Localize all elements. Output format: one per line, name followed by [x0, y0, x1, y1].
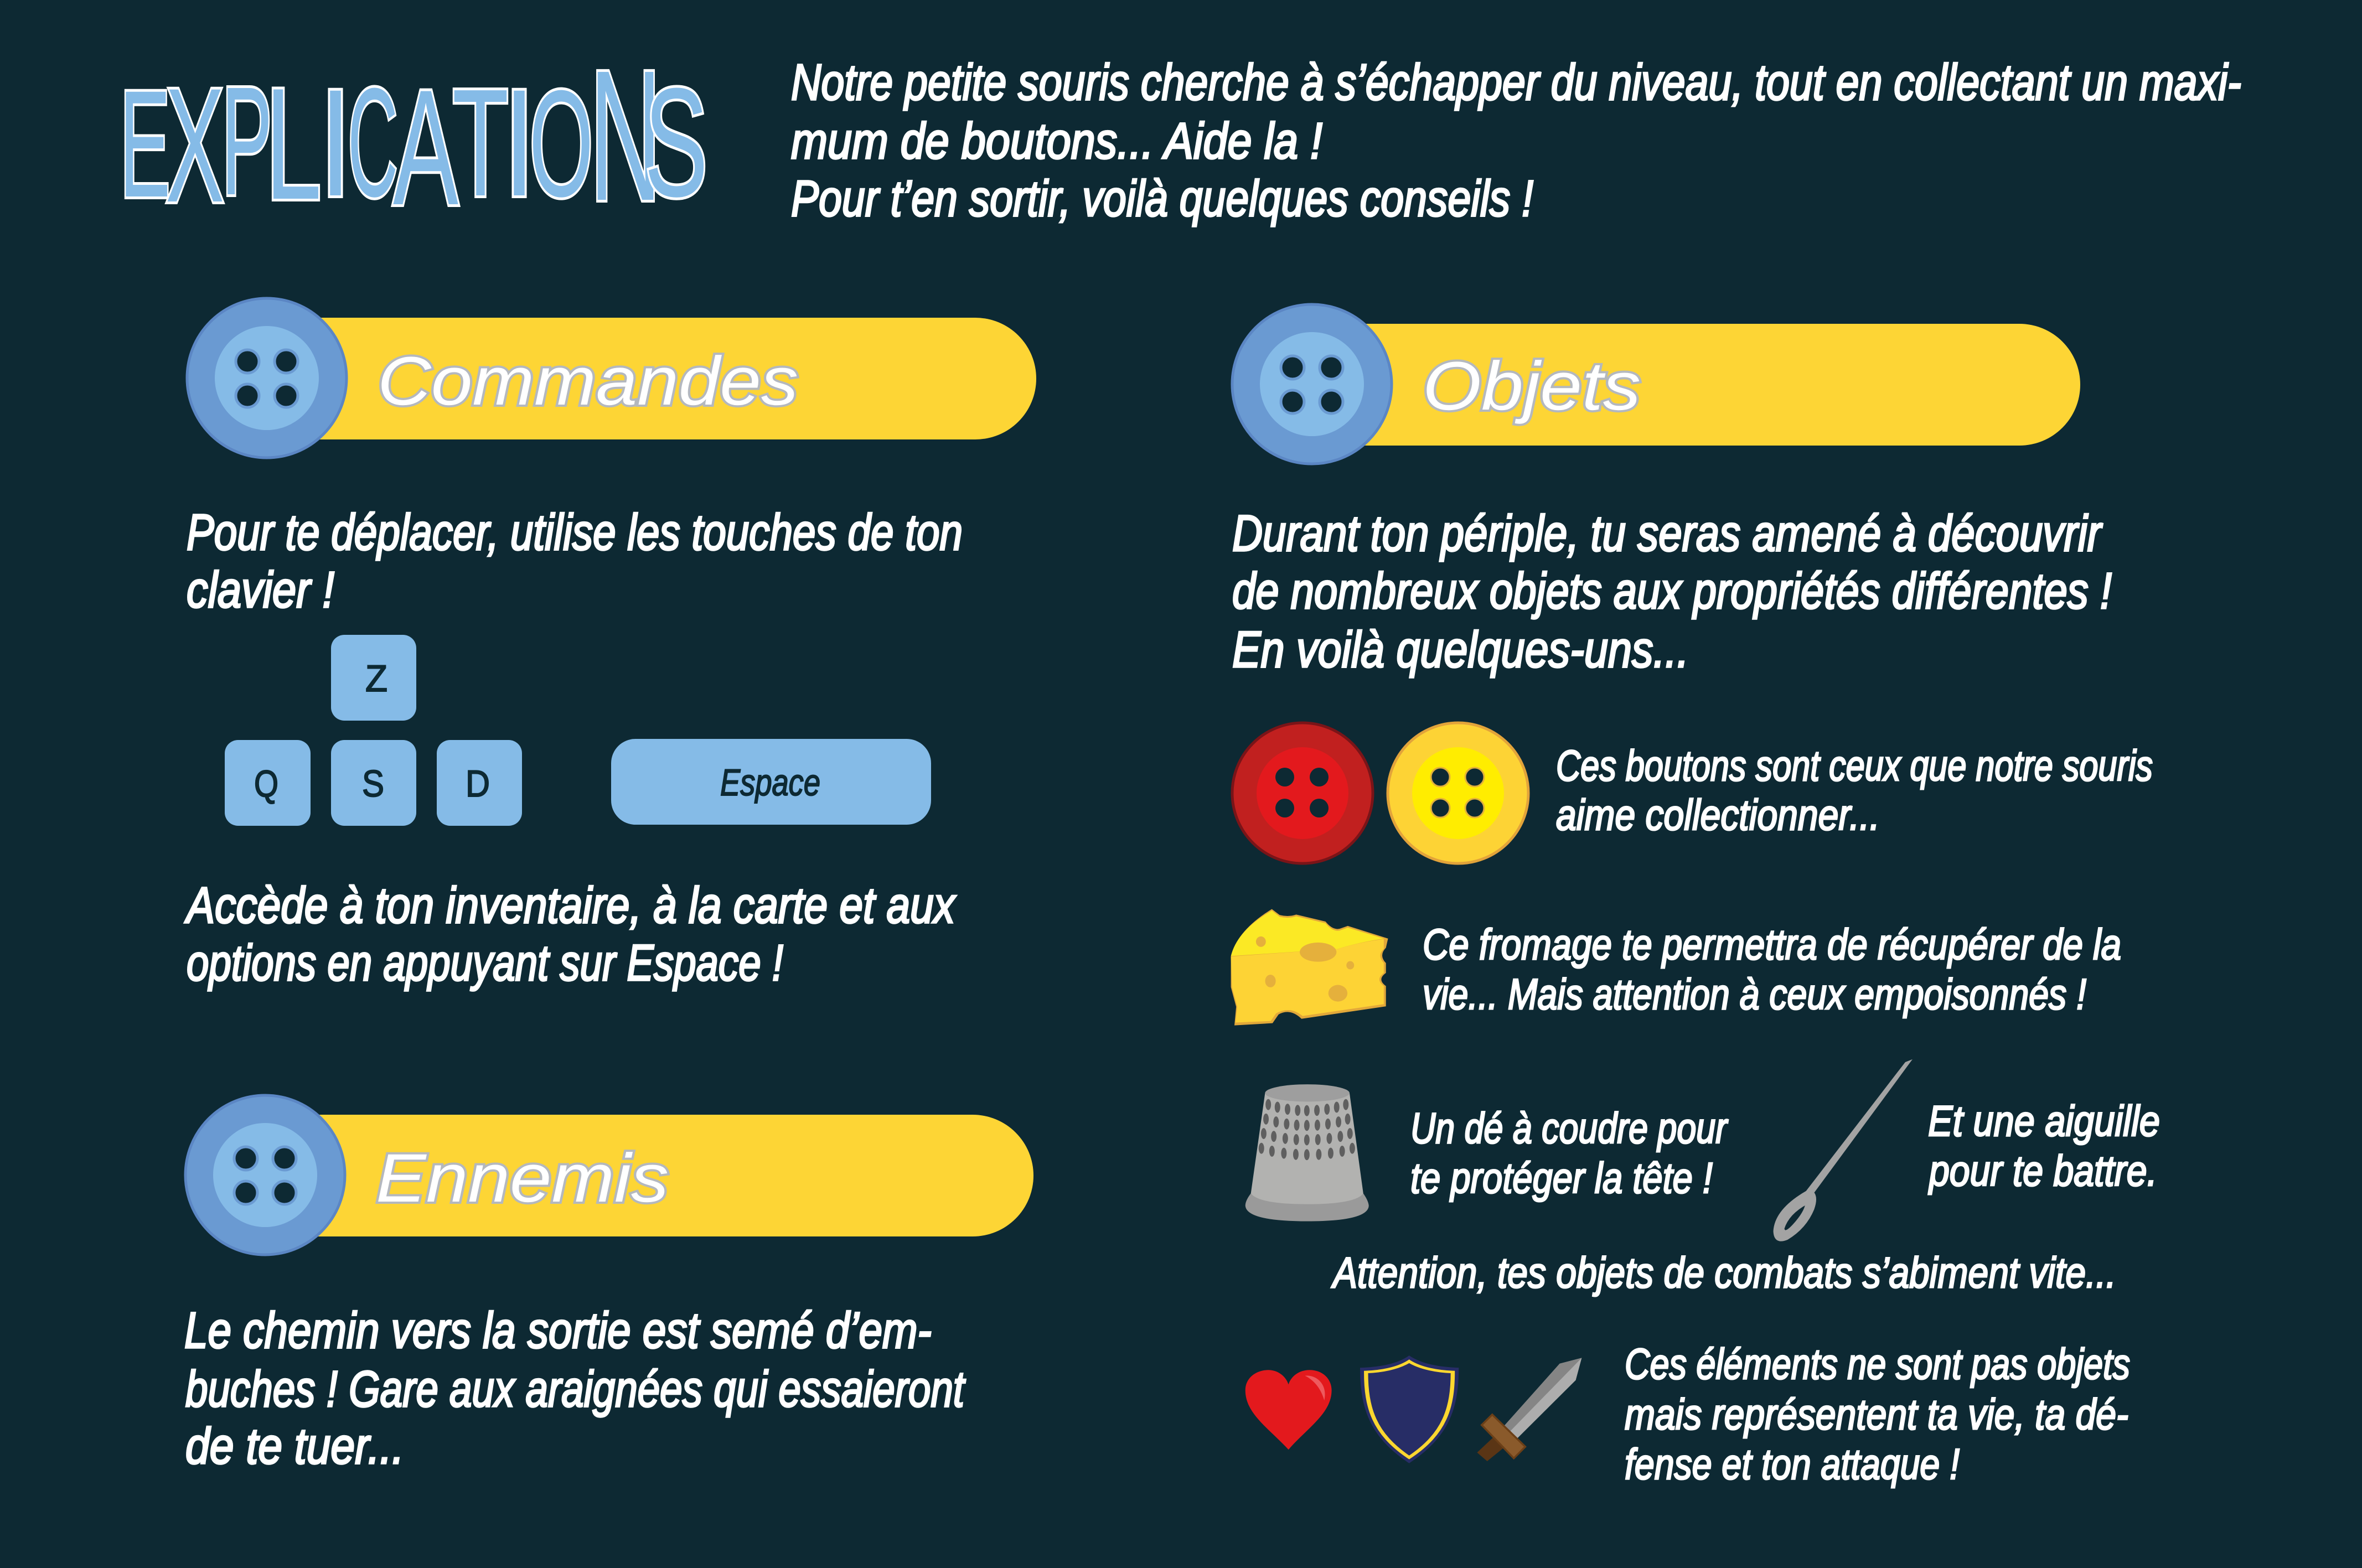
text: boutons — [1556, 741, 2153, 839]
title: C — [348, 56, 398, 229]
title: L — [265, 55, 322, 232]
icon: cheese — [1231, 909, 1388, 1026]
text: objets intro: de nombreux objets aux propriétés différentes ! — [1232, 563, 2112, 619]
title: P — [221, 55, 272, 227]
title: O — [529, 59, 593, 229]
text: fromage — [1423, 920, 2121, 1018]
banner: objets: Objets — [1423, 348, 1641, 425]
panel: objets — [1231, 304, 2160, 1488]
icon: thimble — [1245, 1084, 1369, 1221]
text: objets intro — [1232, 505, 2112, 678]
text: aiguille: pour te battre. — [1928, 1146, 2157, 1195]
text: aiguille — [1928, 1096, 2160, 1195]
icon: red button — [1232, 723, 1373, 863]
icon: sword — [1477, 1358, 1581, 1461]
text: dé à coudre — [1410, 1104, 1728, 1202]
banner: ennemis: Ennemis — [376, 1140, 669, 1217]
text: éléments: mais représentent ta vie, ta dé- — [1625, 1390, 2128, 1438]
keyboard keys: D — [466, 763, 490, 805]
title: E — [120, 59, 170, 229]
icon: needle — [1775, 1061, 1910, 1240]
text: éléments: fense et ton attaque ! — [1625, 1440, 1960, 1488]
text: ennemis: buches ! Gare aux araignées qui essaieront — [185, 1361, 966, 1417]
text: objets intro: En voilà quelques-uns... — [1232, 622, 1689, 678]
title: N — [590, 32, 661, 240]
keyboard keys: Espace — [720, 762, 820, 804]
text: boutons: Ces boutons sont ceux que notre souris — [1556, 741, 2153, 790]
title: S — [644, 56, 708, 229]
banner: commandes: Commandes — [378, 343, 798, 420]
text: dé à coudre: te protéger la tête ! — [1410, 1153, 1713, 1202]
keyboard keys: Z — [365, 658, 387, 700]
intro text: Pour t’en sortir, voilà quelques conseils ! — [791, 170, 1533, 227]
text: inventaire — [184, 877, 956, 991]
text: inventaire: Accède à ton inventaire, à la carte et aux — [184, 877, 956, 934]
panel: ennemis — [184, 1095, 1033, 1474]
title: A — [393, 55, 459, 239]
text: déplacement: Pour te déplacer, utilise les touches de ton — [187, 504, 963, 561]
text: ennemis: Le chemin vers la sortie est semé d’em- — [184, 1302, 932, 1359]
title: I — [319, 58, 352, 228]
banner: commandes — [187, 298, 1036, 458]
icon: shield — [1360, 1355, 1459, 1463]
text: éléments — [1625, 1339, 2130, 1488]
keyboard keys: S — [362, 763, 384, 805]
text: objets intro: Durant ton périple, tu seras amené à découvrir — [1232, 505, 2103, 562]
text: ennemis — [184, 1302, 966, 1474]
text: ennemis: de te tuer... — [185, 1418, 404, 1474]
keyboard keys — [225, 635, 931, 826]
text: inventaire: options en appuyant sur Espace ! — [187, 935, 783, 991]
banner: ennemis — [185, 1095, 1033, 1255]
text: déplacement: clavier ! — [187, 562, 334, 618]
title: X — [166, 55, 224, 236]
keyboard keys: Q — [254, 763, 278, 805]
text: éléments: Ces éléments ne sont pas objets — [1625, 1339, 2130, 1388]
title: T — [452, 58, 509, 228]
panel: commandes — [184, 298, 1036, 991]
text: dé à coudre: Un dé à coudre pour — [1410, 1104, 1728, 1152]
text: fromage: Ce fromage te permettra de récupérer de la — [1423, 920, 2121, 969]
icon: yellow button — [1388, 723, 1528, 863]
text: aiguille: Et une aiguille — [1928, 1096, 2160, 1145]
title — [120, 32, 708, 240]
text: déplacement — [187, 504, 963, 618]
banner: objets — [1232, 304, 2080, 464]
text: fromage: vie... Mais attention à ceux empoisonnés ! — [1423, 970, 2086, 1018]
title: I — [503, 58, 535, 228]
text: attention: Attention, tes objets de combats s’abiment vite... — [1331, 1248, 2116, 1297]
text: boutons: aime collectionner... — [1556, 790, 1880, 839]
icon: heart — [1245, 1370, 1332, 1450]
intro text: mum de boutons... Aide la ! — [791, 113, 1322, 169]
intro text — [791, 54, 2241, 227]
